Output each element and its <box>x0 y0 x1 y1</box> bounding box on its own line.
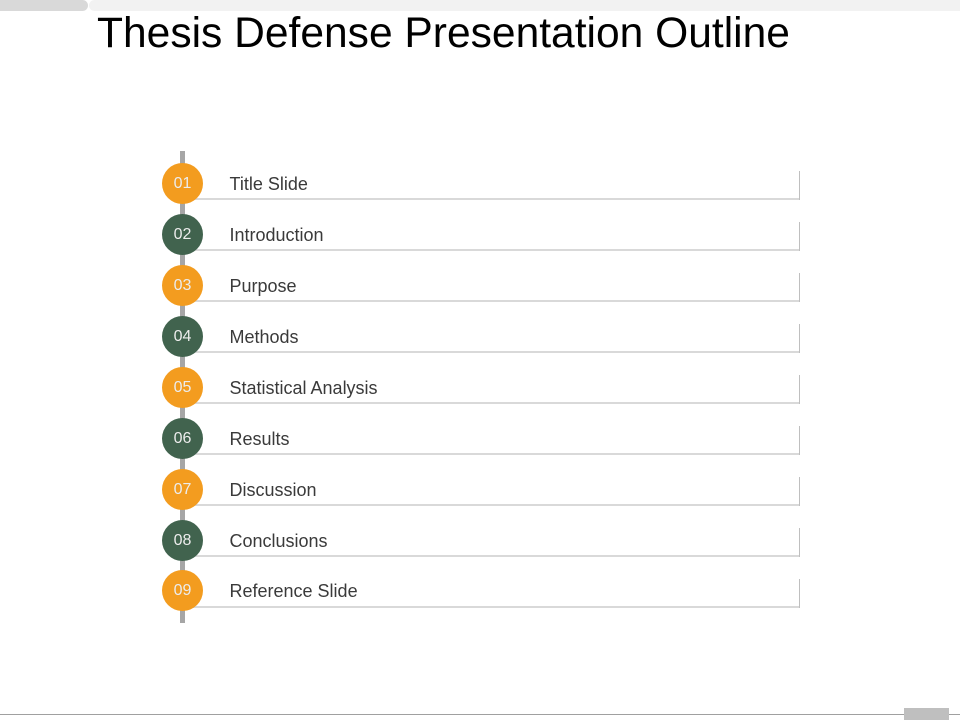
number badge 08: 08 <box>174 532 191 549</box>
number badge 02 <box>162 214 203 255</box>
number badge 02: 02 <box>174 226 191 243</box>
number badge 07 <box>162 469 203 510</box>
number badge 05: 05 <box>174 379 191 396</box>
number badge 04 <box>162 316 203 357</box>
number badge 04: 04 <box>174 328 191 345</box>
row 4 <box>182 324 800 353</box>
row 4: Methods <box>230 327 299 347</box>
row 9 <box>182 579 800 608</box>
row 7: Discussion <box>230 480 317 500</box>
row 6: Results <box>230 429 290 449</box>
number badge 01: 01 <box>174 175 191 192</box>
number badge 09: 09 <box>174 582 191 599</box>
number badge 05 <box>162 367 203 408</box>
number badge 06 <box>162 418 203 459</box>
row 6 <box>182 426 800 455</box>
footer line <box>0 714 960 715</box>
number badge 03 <box>162 265 203 306</box>
number badge 08 <box>162 520 203 561</box>
number badge 06: 06 <box>174 430 191 447</box>
top bar: track <box>89 0 960 11</box>
row 7 <box>182 477 800 506</box>
footer page tab <box>904 708 949 720</box>
row 5 <box>182 375 800 404</box>
number badge 09 <box>162 570 203 611</box>
number badge 07: 07 <box>174 481 191 498</box>
number badge 03: 03 <box>174 277 191 294</box>
row 8 <box>182 528 800 557</box>
row 9: Reference Slide <box>230 581 358 601</box>
row 5: Statistical Analysis <box>230 378 378 398</box>
row 3: Purpose <box>230 276 297 296</box>
row 1: Title Slide <box>230 174 308 194</box>
row 1 <box>182 171 800 200</box>
title: Thesis Defense Presentation Outline <box>97 9 790 57</box>
row 2 <box>182 222 800 251</box>
row 3 <box>182 273 800 302</box>
number badge 01 <box>162 163 203 204</box>
top bar: progress <box>0 0 88 11</box>
row 2: Introduction <box>230 225 324 245</box>
timeline vertical line <box>180 151 185 623</box>
row 8: Conclusions <box>230 531 328 551</box>
